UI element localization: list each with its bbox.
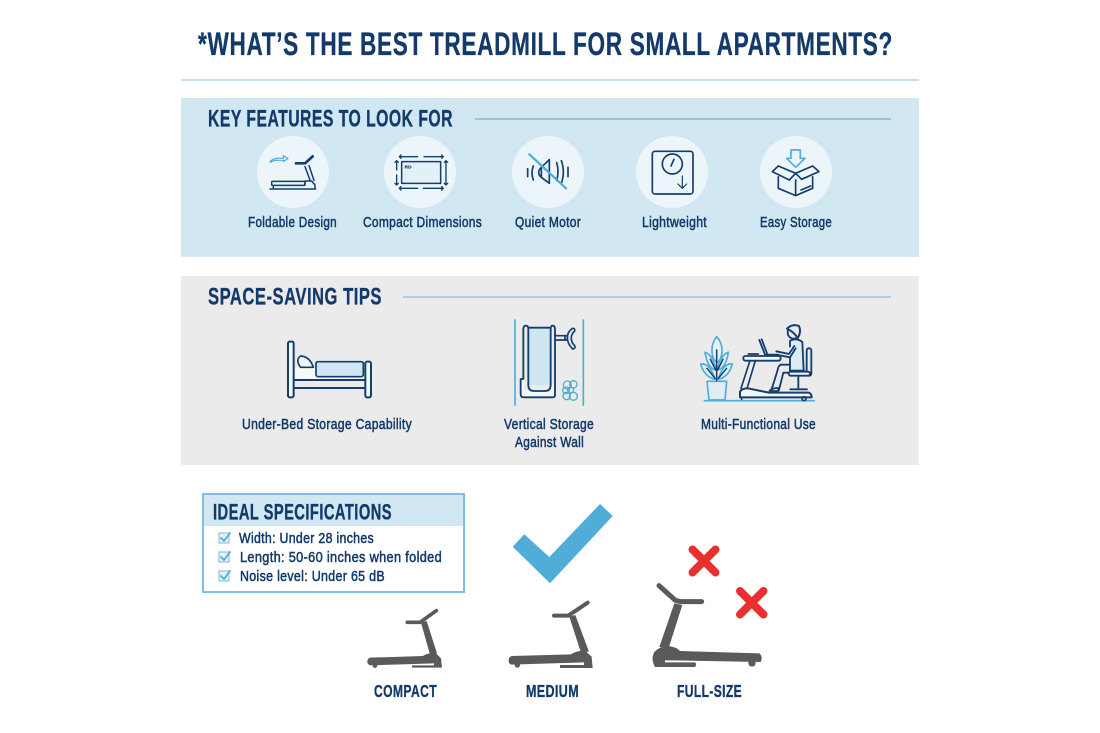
tip: vertical storage [504,320,594,451]
feature: compact dimensions [363,136,482,231]
panel: key features [181,98,919,257]
icon: red cross top [692,550,716,572]
panel: ideal specifications [203,494,464,592]
panel: space-saving tips [181,276,919,465]
treadmill: full-size: FULL-SIZE [677,681,742,701]
feature: lightweight [636,136,708,231]
tip: multi-functional use [701,325,816,433]
feature: compact dimensions: RD [405,165,412,170]
icon: check mark [513,504,613,583]
spec: noise level: Noise level: Under 65 dB [240,569,385,585]
spec: width: Width: Under 28 inches [239,531,374,547]
feature: foldable design: Foldable Design [248,215,337,231]
desk treadmill [704,398,814,403]
tip: under-bed storage: Under-Bed Storage Capability [242,417,412,433]
treadmill: compact [367,611,442,701]
feature: easy storage [760,136,832,231]
feature: lightweight: Lightweight [642,215,707,231]
treadmill: full-size [653,586,762,701]
icon: red cross right [740,591,764,614]
heading: ideal specifications: IDEAL SPECIFICATIONS [213,500,392,524]
tip: multi-functional use: Multi-Functional Use [701,417,816,433]
chair [807,348,811,376]
treadmill: compact: COMPACT [374,681,437,701]
feature: quiet motor [512,136,584,231]
heading: space-saving tips: SPACE-SAVING TIPS [208,284,382,310]
feature: compact dimensions: Compact Dimensions [363,215,482,231]
heading: key features: KEY FEATURES TO LOOK FOR [208,106,453,132]
treadmill: medium [509,603,593,701]
tip: under-bed storage [242,342,412,433]
spec: length: Length: 50-60 inches when folded [240,550,442,566]
treadmill: medium: MEDIUM [526,681,579,701]
feature: easy storage: Easy Storage [760,215,832,231]
tip: vertical storage: Against Wall [515,435,584,451]
tip: vertical storage: Vertical Storage [504,417,594,433]
plant [701,337,732,400]
feature: quiet motor: Quiet Motor [515,215,581,231]
person [790,339,804,371]
feature: foldable design [248,136,337,231]
